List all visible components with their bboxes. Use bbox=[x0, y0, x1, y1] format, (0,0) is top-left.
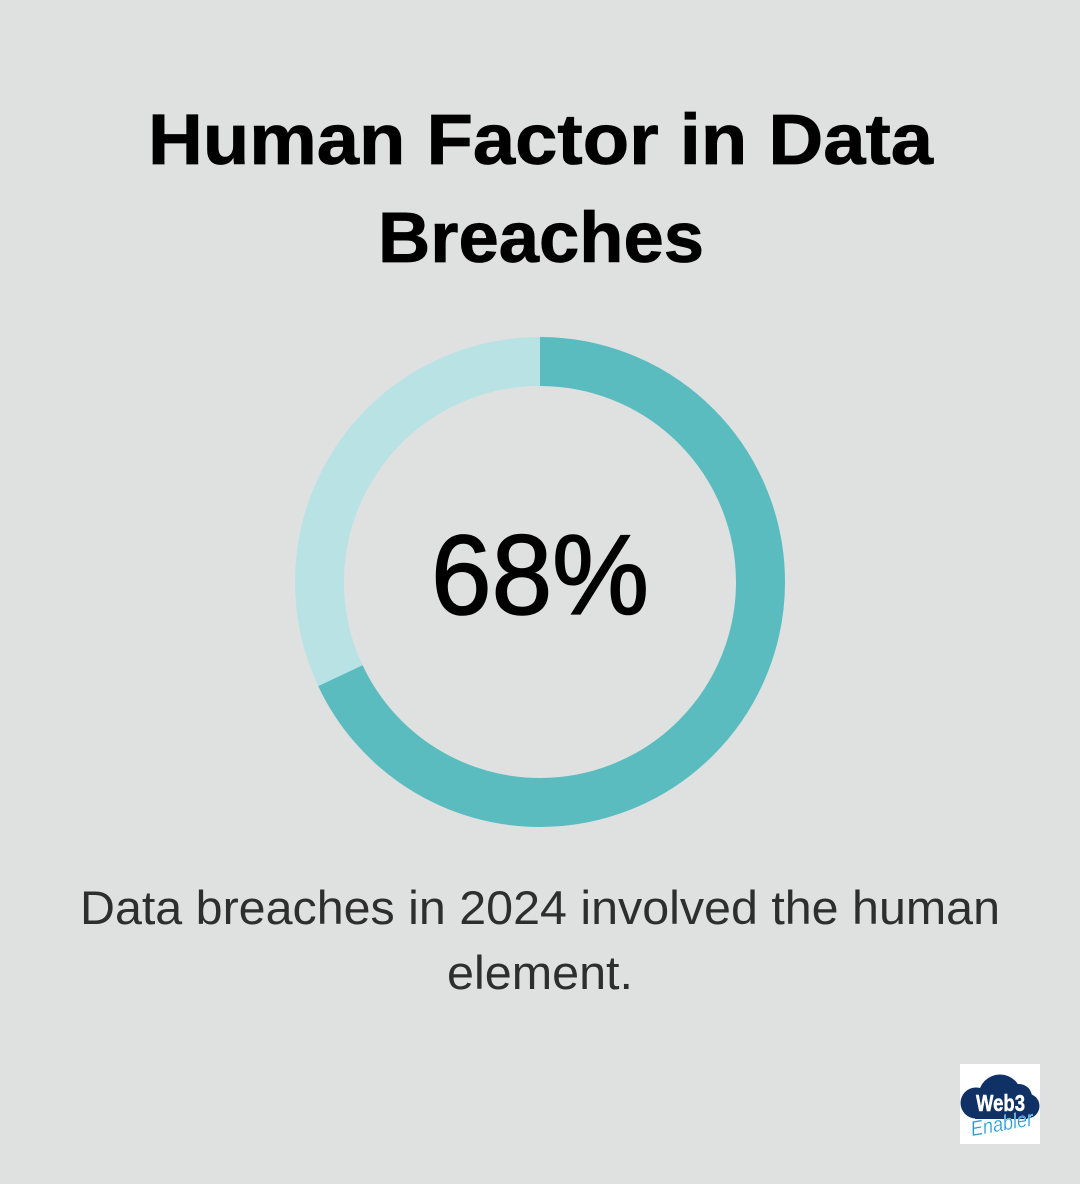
logo: Web3 Enabler: Enabler bbox=[969, 1107, 1036, 1141]
logo: Web3 Enabler bbox=[960, 1064, 1040, 1144]
description text bbox=[80, 881, 1000, 999]
title: Breaches bbox=[378, 199, 704, 278]
description text: Data breaches in 2024 involved the human bbox=[80, 881, 1000, 934]
icon: cloud bbox=[960, 1074, 1040, 1119]
title: Human Factor in Data bbox=[148, 101, 934, 180]
description text: element. bbox=[447, 946, 633, 999]
logo: Web3 Enabler: Web3 bbox=[976, 1090, 1025, 1116]
donut value: 68% bbox=[431, 512, 649, 638]
title bbox=[148, 101, 934, 278]
donut chart: 68% bbox=[320, 362, 760, 802]
